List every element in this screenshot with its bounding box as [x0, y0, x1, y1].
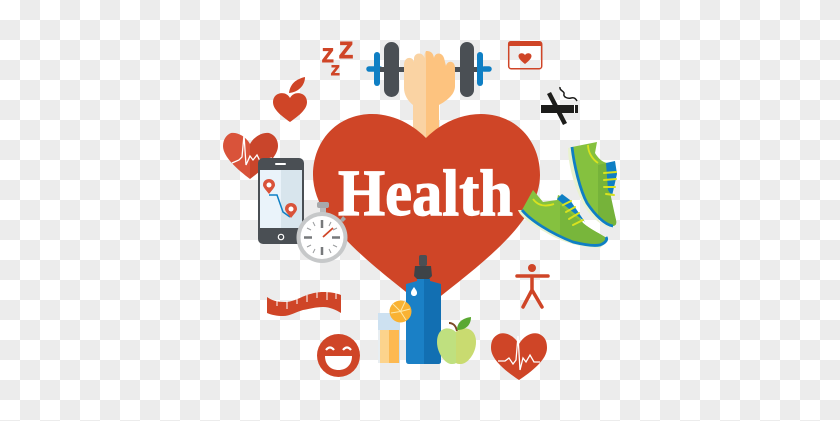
icon: human figure [517, 264, 548, 307]
icon: measuring tape [267, 292, 341, 316]
icon: water bottle [406, 255, 441, 364]
icon: sleep zzz: Z [339, 37, 353, 63]
icon: smiling face [317, 334, 360, 377]
icon: sleep zzz: Z [322, 46, 334, 67]
icon: sleep zzz: Z [331, 62, 340, 78]
icon: no smoking [541, 87, 578, 124]
icon: heart with pulse, left [223, 133, 278, 179]
heart: main red heart [313, 114, 540, 308]
icon: heart with pulse, right [491, 333, 547, 380]
icon: hand lifting dumbbell [369, 42, 489, 139]
upper shoe [568, 142, 617, 229]
icon: running shoes [518, 142, 617, 248]
title: Health: Health [338, 157, 513, 230]
icon: sleep zzz [322, 37, 353, 78]
icon: apple heart [273, 77, 307, 122]
icon: glass of juice with orange [378, 300, 412, 363]
icon: phone with map [258, 158, 304, 244]
icon: calendar with heart [508, 41, 542, 69]
icon: stopwatch [296, 202, 348, 263]
lower shoe [518, 190, 607, 248]
icon: green apple [437, 317, 476, 364]
